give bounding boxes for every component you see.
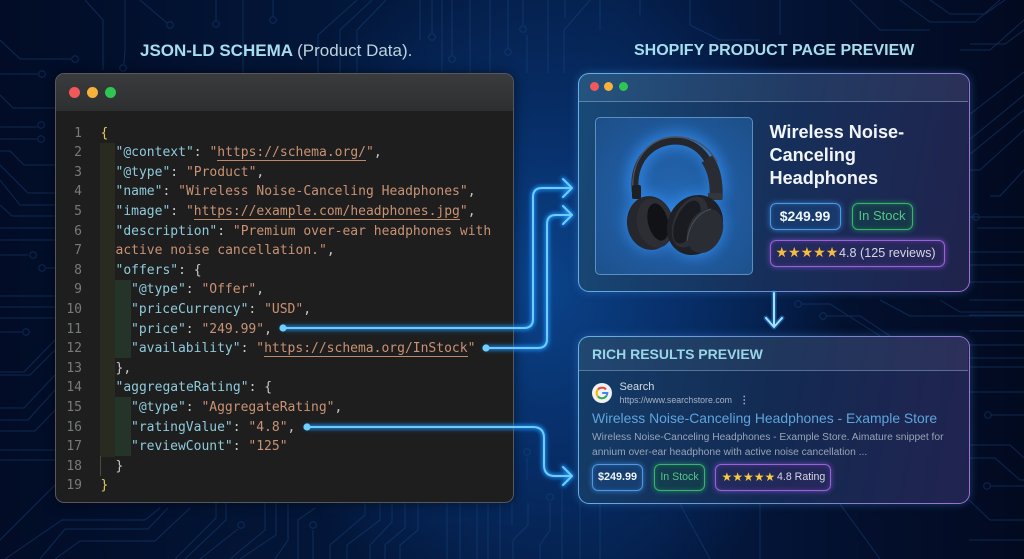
- heading: JSON-LD schema: JSON-LD SCHEMA (Product Data).: [140, 40, 412, 60]
- result snippet: [592, 432, 944, 458]
- code lines: "@type": "Offer",: [131, 282, 264, 297]
- editor title bar: [56, 74, 513, 111]
- code lines: "@context": "https://schema.org/",: [116, 145, 382, 160]
- code lines: 2: [74, 145, 82, 160]
- icon: headphones: [618, 125, 732, 264]
- rating tag: 4.8 (125 reviews): [839, 246, 936, 260]
- heading: Shopify product page preview: SHOPIFY PRODUCT PAGE PREVIEW: [634, 42, 914, 58]
- price tag: $249.99: [780, 208, 830, 224]
- code lines: "reviewCount": "125": [131, 439, 288, 454]
- result snippet: annium over-ear headphone with active noise cancellation ...: [592, 446, 867, 458]
- connector: price: [279, 179, 572, 332]
- price tag: $249.99: [598, 471, 637, 483]
- code lines: "price": "249.99",: [131, 322, 272, 336]
- source name: Search: [620, 381, 654, 393]
- stock tag: In Stock: [859, 208, 905, 222]
- code lines: "@type": "AggregateRating",: [131, 400, 342, 415]
- code lines: 13: [66, 361, 82, 376]
- arrow: product preview to rich results: [764, 290, 784, 330]
- code lines: 12: [66, 341, 82, 356]
- code lines: 7: [74, 243, 82, 258]
- code lines: 5: [74, 204, 82, 219]
- code lines: 17: [66, 439, 82, 454]
- code lines: "availability": "https://schema.org/InStock": [131, 341, 475, 356]
- connector: rating: [303, 423, 572, 485]
- code lines: 19: [66, 478, 82, 493]
- product title: Headphones: [770, 168, 878, 188]
- code lines: "ratingValue": "4.8",: [131, 420, 295, 434]
- code lines: 3: [74, 165, 82, 180]
- rating tag: ★★★★★: [722, 470, 775, 484]
- code lines: },: [116, 361, 131, 376]
- code lines: }: [100, 478, 108, 493]
- rating tag: [715, 464, 831, 491]
- result snippet: Wireless Noise-Canceling Headphones - Example Store. Aimature snippet for: [592, 432, 944, 442]
- product title: [770, 122, 904, 188]
- code lines: "name": "Wireless Noise-Canceling Headphones",: [116, 184, 476, 199]
- panel: Shopify product preview: [578, 73, 970, 292]
- code lines: "priceCurrency": "USD",: [131, 302, 311, 317]
- code lines: 10: [66, 302, 82, 317]
- price tag: [770, 202, 840, 230]
- rating tag: 4.8 Rating: [777, 471, 825, 483]
- code lines: active noise cancellation.",: [116, 243, 335, 258]
- rating tag: [770, 240, 944, 266]
- product title: Wireless Noise-: [770, 122, 904, 142]
- panel: rich results preview: [578, 336, 970, 504]
- product title: Canceling: [770, 145, 856, 165]
- rating tag: ★★★★★: [776, 244, 838, 260]
- stock tag: In Stock: [660, 471, 699, 483]
- code lines: 6: [74, 224, 82, 238]
- code lines: 14: [66, 380, 82, 395]
- panel header: [579, 337, 968, 371]
- stock tag: [654, 464, 705, 491]
- code lines: 16: [66, 420, 82, 434]
- code lines: "image": "https://example.com/headphones.jpg",: [116, 204, 476, 219]
- code lines: "aggregateRating": {: [116, 380, 272, 395]
- code lines: {: [100, 126, 108, 140]
- code lines: 1: [74, 126, 82, 140]
- code lines: 8: [74, 263, 82, 278]
- stock tag: [852, 202, 912, 230]
- code lines: "@type": "Product",: [116, 165, 264, 180]
- source url: https://www.searchstore.com ⋮: [620, 395, 749, 406]
- code lines: [66, 126, 491, 493]
- code lines: "description": "Premium over-ear headphones with: [116, 224, 491, 238]
- result title: Wireless Noise-Canceling Headphones - Example Store: [592, 410, 937, 426]
- icon: Google logo: [592, 383, 612, 403]
- code lines: 11: [66, 322, 82, 336]
- panel: code editor: [55, 73, 514, 503]
- code lines: }: [116, 459, 123, 474]
- code lines: 4: [74, 184, 82, 199]
- code lines: 18: [66, 459, 82, 474]
- browser header: [579, 74, 968, 102]
- code lines: 15: [66, 400, 82, 415]
- price tag: [592, 464, 643, 491]
- code lines: 9: [74, 282, 82, 297]
- panel header: RICH RESULTS PREVIEW: [592, 346, 763, 362]
- product image card: [595, 117, 753, 275]
- connector: availability: [482, 206, 572, 352]
- code lines: "offers": {: [116, 263, 202, 278]
